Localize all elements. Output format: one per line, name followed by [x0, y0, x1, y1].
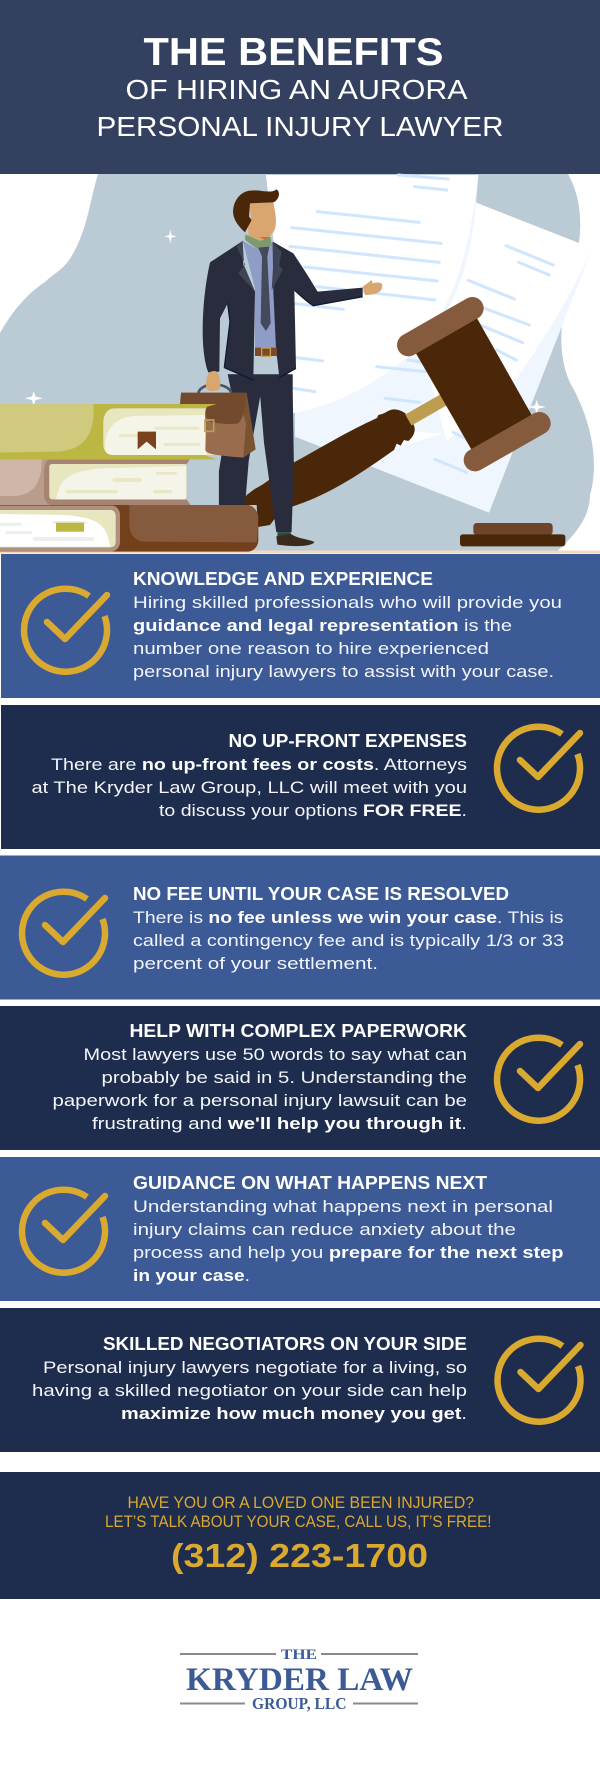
- panel: complex paperwork: [0, 1006, 600, 1150]
- text: skilled negotiators: Personal injury lawyers negotiate for a living, so: [43, 1358, 467, 1377]
- panel: no fee until resolved: [0, 856, 600, 1000]
- text: skilled negotiators: maximize how much money you get .: [121, 1404, 467, 1423]
- icon: check circle: [497, 727, 580, 810]
- text: what happens next: GUIDANCE ON WHAT HAPPENS NEXT: [133, 1173, 487, 1193]
- icon: check circle: [22, 1190, 105, 1273]
- gavel: [241, 308, 565, 546]
- sparkles: [24, 230, 546, 414]
- text: no up-front expenses: [32, 731, 467, 820]
- text: no up-front expenses: at The Kryder Law Group, LLC will meet with you: [32, 778, 467, 797]
- text: what happens next: in your case .: [133, 1266, 250, 1285]
- icon: check circle: [497, 1038, 580, 1121]
- text: no fee until resolved: percent of your settlement.: [133, 954, 378, 973]
- text: no fee until resolved: [133, 884, 564, 973]
- briefcase: [180, 393, 256, 458]
- call to action banner: [0, 1472, 600, 1599]
- man: upper body: [198, 189, 382, 393]
- title: OF HIRING AN AURORA: [126, 74, 468, 105]
- text: no fee until resolved: There is no fee unless we win your case . This is: [133, 908, 564, 927]
- call to action text: LET’S TALK ABOUT YOUR CASE, CALL US, IT’S FREE!: [105, 1513, 492, 1531]
- logo: The Kryder Law Group: KRYDER LAW: [186, 1662, 413, 1698]
- header banner: [0, 0, 600, 174]
- text: complex paperwork: probably be said in 5. Understanding the: [102, 1068, 467, 1087]
- text: skilled negotiators: [32, 1334, 467, 1423]
- middle book: [0, 459, 191, 505]
- text: knowledge and experience: [133, 569, 562, 681]
- text: what happens next: [133, 1173, 564, 1285]
- text: what happens next: injury claims can reduce anxiety about the: [133, 1220, 516, 1239]
- text: what happens next: Understanding what happens next in personal: [133, 1197, 553, 1216]
- text: complex paperwork: Most lawyers use 50 words to say what can: [84, 1045, 467, 1064]
- icon: check circle: [22, 892, 105, 975]
- text: complex paperwork: [52, 1021, 467, 1133]
- panel: what happens next: [0, 1157, 600, 1301]
- legal documents: [266, 175, 592, 513]
- man: legs and shoe: [219, 374, 315, 546]
- text: complex paperwork: paperwork for a personal injury lawsuit can be: [52, 1091, 467, 1110]
- title: THE BENEFITS: [144, 31, 444, 74]
- text: knowledge and experience: guidance and legal representation is the: [133, 616, 512, 635]
- title: [96, 31, 504, 142]
- text: no up-front expenses: to discuss your options FOR FREE .: [159, 801, 467, 820]
- logo: The Kryder Law Group: [180, 1647, 418, 1713]
- panel: knowledge and experience: [1, 554, 600, 698]
- text: no fee until resolved: called a contingency fee and is typically 1/3 or 33: [133, 931, 564, 950]
- call to action text: [105, 1494, 492, 1531]
- text: no up-front expenses: There are no up-front fees or costs . Attorneys: [51, 755, 467, 774]
- call to action text: HAVE YOU OR A LOVED ONE BEEN INJURED?: [128, 1494, 474, 1512]
- text: knowledge and experience: KNOWLEDGE AND EXPERIENCE: [133, 569, 433, 589]
- panel: skilled negotiators: [0, 1308, 600, 1452]
- top book: [0, 404, 217, 459]
- icon: check circle: [24, 589, 107, 672]
- text: skilled negotiators: having a skilled negotiator on your side can help: [32, 1381, 467, 1400]
- logo: The Kryder Law Group: GROUP, LLC: [252, 1694, 346, 1713]
- text: skilled negotiators: SKILLED NEGOTIATORS ON YOUR SIDE: [103, 1334, 467, 1354]
- text: what happens next: process and help you prepare for the next step: [133, 1243, 564, 1262]
- text: knowledge and experience: number one reason to hire experienced: [133, 639, 489, 658]
- illustration: lawyer with books and gavel: [0, 174, 600, 554]
- background blob: [0, 174, 594, 553]
- logo: The Kryder Law Group: THE: [281, 1647, 317, 1663]
- title: PERSONAL INJURY LAWYER: [96, 111, 504, 142]
- text: no up-front expenses: NO UP-FRONT EXPENSES: [228, 731, 467, 751]
- ground line: [0, 550, 600, 554]
- text: knowledge and experience: Hiring skilled professionals who will provide you: [133, 593, 562, 612]
- text: no fee until resolved: NO FEE UNTIL YOUR CASE IS RESOLVED: [133, 884, 509, 904]
- icon: check circle: [498, 1339, 581, 1422]
- text: complex paperwork: frustrating and we'll help you through it .: [92, 1114, 467, 1133]
- text: knowledge and experience: personal injury lawyers to assist with your case.: [133, 662, 554, 681]
- bottom book: [0, 505, 258, 552]
- panel: no up-front expenses: [1, 705, 600, 849]
- phone number: (312) 223-1700: [171, 1537, 428, 1574]
- stack of books: [0, 393, 258, 552]
- text: complex paperwork: HELP WITH COMPLEX PAPERWORK: [130, 1021, 467, 1041]
